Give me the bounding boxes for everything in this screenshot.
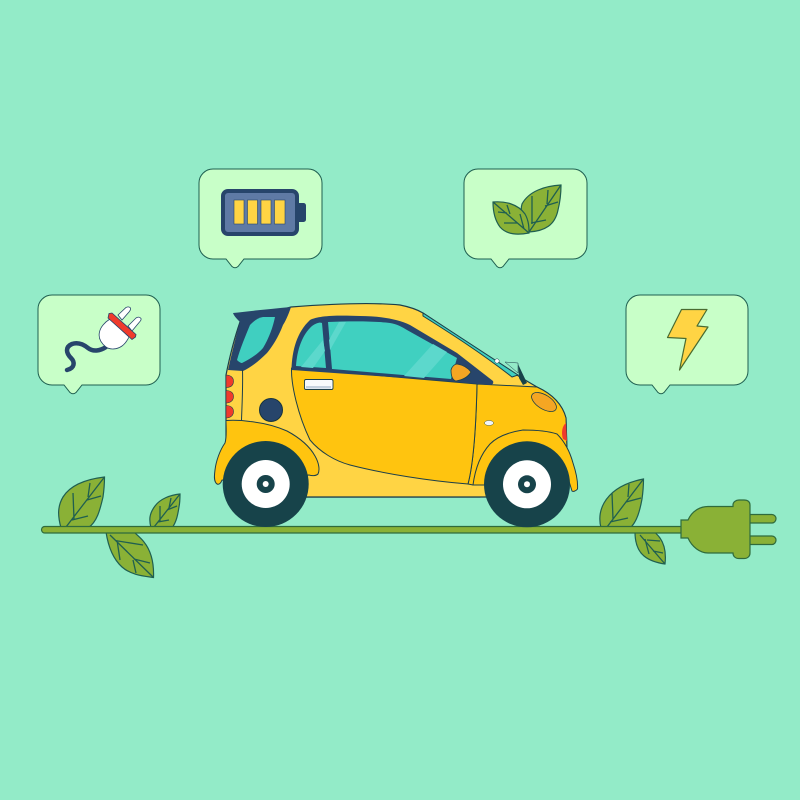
car door xyxy=(291,368,477,484)
car rear window frame and spoiler xyxy=(228,307,291,371)
car body shell xyxy=(226,304,570,497)
leaf: stem bottom right xyxy=(635,532,665,564)
car rear light panel line xyxy=(242,370,243,420)
car rear wheel xyxy=(223,441,309,527)
speech bubble: power plug xyxy=(38,295,160,394)
car front panel xyxy=(468,384,570,485)
leaf: stem top right xyxy=(600,479,644,528)
car front fender xyxy=(473,430,578,491)
icon: plug red collar xyxy=(108,313,136,340)
car side indicator xyxy=(484,420,494,426)
icon: battery cap xyxy=(296,203,306,222)
speech bubble: battery xyxy=(199,169,322,268)
car rear-bottom sill xyxy=(240,440,500,497)
icon: plug body xyxy=(99,319,129,349)
car mirror xyxy=(451,364,471,381)
speech bubble: lightning xyxy=(626,295,748,394)
car tail lights xyxy=(226,375,234,418)
plug: green charging plug xyxy=(681,500,776,558)
car headlight xyxy=(528,389,560,415)
car door handle xyxy=(304,380,333,390)
car wiper xyxy=(495,359,527,385)
car windshield strip xyxy=(423,313,518,377)
plug body xyxy=(681,500,750,558)
car fuel cap xyxy=(260,398,282,422)
car rear fender xyxy=(214,420,319,484)
car front marker xyxy=(562,423,567,441)
stem: charging cable xyxy=(42,526,684,533)
leaf: stem top middle xyxy=(150,494,180,528)
icon: left leaf xyxy=(493,202,529,234)
icon: right leaf xyxy=(521,185,561,232)
car rear door glass xyxy=(296,323,326,368)
icon: plug cable xyxy=(67,343,106,370)
icon: battery case xyxy=(223,191,297,234)
plug prongs xyxy=(745,514,776,544)
car front wheel xyxy=(484,441,570,527)
leaf: stem bottom left xyxy=(106,532,154,578)
car rear glass xyxy=(237,317,275,363)
icon: battery cells xyxy=(234,200,285,224)
icon: lightning bolt xyxy=(668,310,708,370)
car side glass xyxy=(328,321,457,379)
leaf: stem top left xyxy=(59,477,104,528)
icon: plug prongs xyxy=(118,307,141,331)
car xyxy=(214,304,578,527)
car window frame xyxy=(292,316,493,385)
speech bubble: leaves xyxy=(464,169,587,268)
